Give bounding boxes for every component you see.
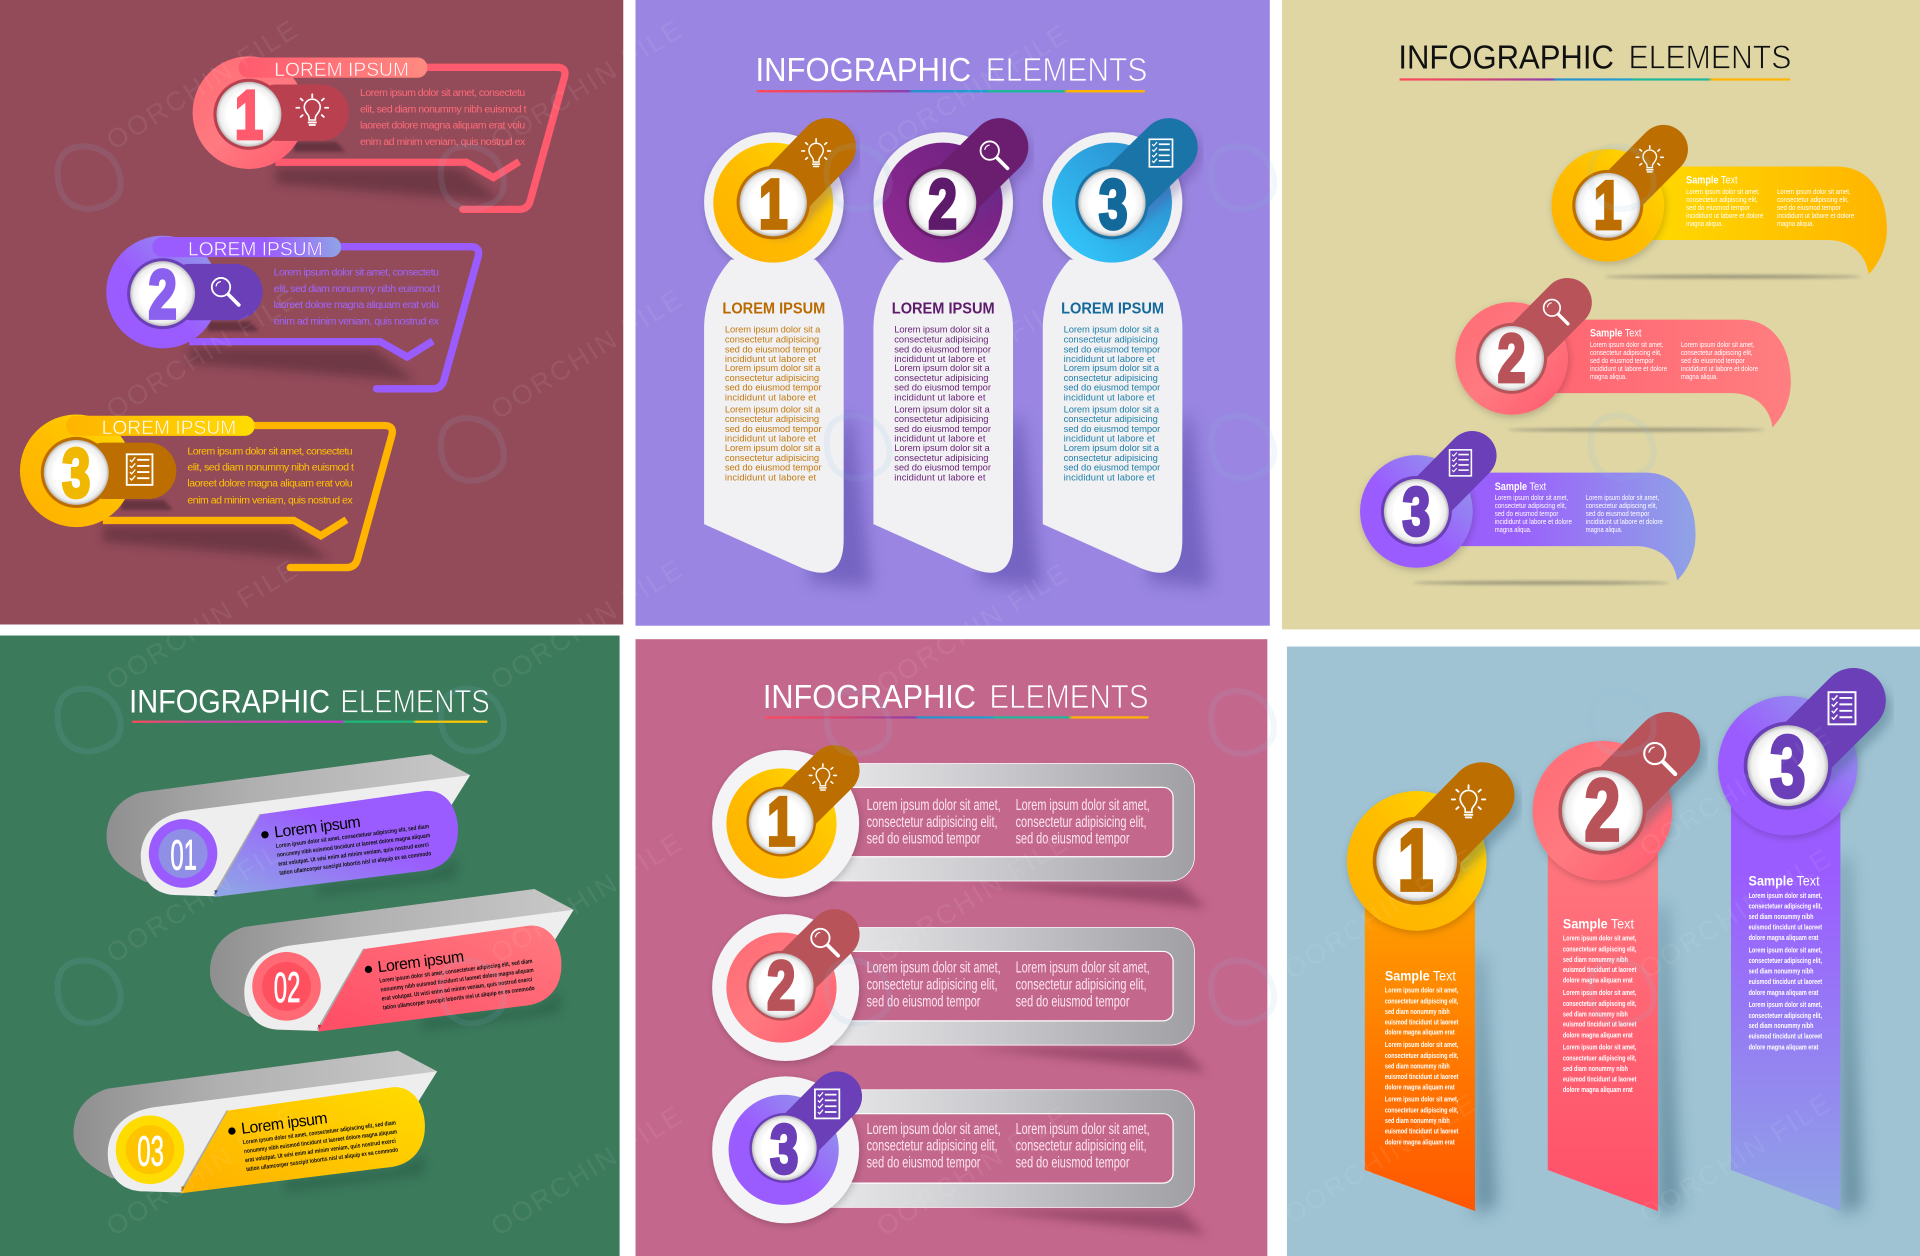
text: OORCHIN FILE xyxy=(101,283,304,425)
banner 3: consectetuer adipiscing elit, xyxy=(1749,1011,1822,1020)
callout 2: violet xyxy=(106,236,479,389)
column 1: consectetur adipisicing xyxy=(725,413,819,424)
column 1: 1 xyxy=(759,165,788,244)
banner 3: sed diam nonummy nibh xyxy=(1749,912,1814,921)
ribbon 2: magna aliqua. xyxy=(1681,372,1718,381)
banner 3: sed diam nonummy nibh xyxy=(1749,1021,1814,1030)
callout 2: violet: enim ad minim veniam, quis nostrud ex xyxy=(274,315,440,327)
ribbon 1: incididunt ut labore et dolore xyxy=(1777,211,1854,220)
banner 2: Lorem ipsum dolor sit amet, xyxy=(1563,934,1636,943)
callout 3: amber: laoreet dolore magna aliquam erat volu xyxy=(187,478,353,490)
ribbon 3: Sample Text xyxy=(1495,481,1546,493)
bar 2: Lorem ipsum xyxy=(377,948,465,976)
title xyxy=(129,684,490,723)
banner 1: Lorem ipsum dolor sit amet, xyxy=(1385,1095,1458,1104)
banner 2 xyxy=(1533,741,1680,1215)
row 3: consectetur adipisicing elit, xyxy=(867,1138,998,1155)
banner 3 xyxy=(1718,692,1862,1215)
column 1: sed do eiusmod tempor xyxy=(725,343,822,354)
row 2: sed do eiusmod tempor xyxy=(1016,994,1129,1011)
ribbon 1: Lorem ipsum dolor sit amet, xyxy=(1777,187,1851,196)
title: INFOGRAPHIC xyxy=(129,684,330,720)
column 3: incididunt ut labore et xyxy=(1064,353,1155,364)
bar 1: tation ullamcorper suscipit lobortis nisl ut aliquip ex ea commodo xyxy=(279,850,432,877)
column 3: 3 xyxy=(1099,165,1128,244)
column 1: sed do eiusmod tempor xyxy=(725,462,822,473)
text: OORCHIN FILE xyxy=(1634,842,1837,985)
text: OORCHIN FILE xyxy=(871,826,1075,969)
ribbon 2: Sample Text xyxy=(1590,328,1641,340)
banner 2: consectetuer adipiscing elit, xyxy=(1563,999,1636,1008)
column 3: sed do eiusmod tempor xyxy=(1064,382,1160,393)
banner 2: sed diam nonummy nibh xyxy=(1563,1064,1628,1073)
bar 3: Lorem ipsum dolor sit amet, consectetuer adipiscing elit, sed diam xyxy=(242,1119,397,1146)
row 3: 3 xyxy=(770,1110,798,1187)
banner 2: sed diam nonummy nibh xyxy=(1563,955,1628,964)
ribbon 1: Lorem ipsum dolor sit amet, xyxy=(1686,187,1760,196)
ribbon 3: Lorem ipsum dolor sit amet, xyxy=(1495,493,1568,502)
callout 3: amber: 3 xyxy=(62,434,90,511)
row 3 xyxy=(712,1076,1206,1235)
column 2: sed do eiusmod tempor xyxy=(894,423,991,434)
column 2: incididunt ut labore et xyxy=(894,353,986,364)
ribbon 3: 3 xyxy=(1403,473,1430,549)
banner 3: euismod tincidunt ut laoreet xyxy=(1749,977,1822,986)
text: OORCHIN FILE xyxy=(101,553,304,696)
column 2: Lorem ipsum dolor sit a xyxy=(894,324,991,335)
panel: green 3D bars xyxy=(0,636,620,1256)
ribbon 2: magna aliqua. xyxy=(1590,372,1627,381)
callout 2: violet: elit, sed diam nonummy nibh euismod t xyxy=(274,283,440,295)
column 2: consectetur adipisicing xyxy=(894,413,989,424)
column 3: LOREM IPSUM xyxy=(1061,300,1164,317)
ribbon 2: consectetur adipiscing elit, xyxy=(1590,348,1662,357)
column 1: sed do eiusmod tempor xyxy=(725,382,822,393)
text: OORCHIN FILE xyxy=(101,13,304,156)
column 1: Lorem ipsum dolor sit a xyxy=(725,403,821,414)
ribbon 1: consectetur adipiscing elit, xyxy=(1777,195,1849,204)
column 2: incididunt ut labore et xyxy=(894,471,986,482)
text: OORCHIN FILE xyxy=(101,826,304,969)
column 2: incididunt ut labore et xyxy=(894,391,986,402)
banner 2: sed diam nonummy nibh xyxy=(1563,1009,1628,1018)
text: OORCHIN FILE xyxy=(486,826,689,969)
column 1: Lorem ipsum dolor sit a xyxy=(725,324,821,335)
bar 2: tation ullamcorper suscipit lobortis nisl ut aliquip ex ea commodo xyxy=(382,985,535,1012)
banner 1: consectetuer adipiscing elit, xyxy=(1385,1106,1458,1115)
ribbon 2: Lorem ipsum dolor sit amet, xyxy=(1681,340,1754,349)
text: OORCHIN FILE xyxy=(101,1099,304,1242)
callout 3: amber xyxy=(20,414,392,568)
banner 1: dolore magna aliquam erat xyxy=(1385,1083,1455,1092)
ribbon 1: incididunt ut labore et dolore xyxy=(1686,211,1763,220)
ribbon 1: consectetur adipiscing elit, xyxy=(1686,195,1758,204)
row 1: 1 xyxy=(767,782,795,860)
ribbon 3: sed do eiusmod tempor xyxy=(1495,509,1559,518)
column 2: sed do eiusmod tempor xyxy=(894,382,991,393)
panel: pink framed rows xyxy=(636,639,1267,1256)
bar 3: tation ullamcorper suscipit lobortis nisl ut aliquip ex ea commodo xyxy=(246,1147,399,1173)
banner 1: consectetuer adipiscing elit, xyxy=(1385,996,1458,1005)
column 1 xyxy=(704,132,872,588)
callout 3: amber: Lorem ipsum dolor sit amet, consectetu xyxy=(187,445,353,457)
title xyxy=(1398,40,1791,81)
callout 2: violet: 2 xyxy=(149,255,177,333)
ribbon 1 xyxy=(1551,146,1887,278)
banner 2: Sample Text xyxy=(1563,915,1634,931)
ribbon 3 xyxy=(1360,450,1696,584)
title: ELEMENTS xyxy=(340,684,490,720)
column 2: consectetur adipisicing xyxy=(894,452,989,463)
row 3: sed do eiusmod tempor xyxy=(867,1155,980,1172)
panel: blue vertical banners xyxy=(1287,647,1920,1256)
bar 1 xyxy=(107,754,470,898)
callout 2: violet: laoreet dolore magna aliquam erat volu xyxy=(274,299,439,311)
bar 3: Lorem ipsum xyxy=(240,1110,329,1138)
banner 3: Lorem ipsum dolor sit amet, xyxy=(1749,945,1822,954)
column 3 xyxy=(1043,132,1211,588)
banner 2: euismod tincidunt ut laoreet xyxy=(1563,1074,1637,1083)
text: OORCHIN FILE xyxy=(486,283,689,425)
row 3: consectetur adipisicing elit, xyxy=(1016,1138,1147,1155)
banner 3: euismod tincidunt ut laoreet xyxy=(1749,923,1822,932)
title: INFOGRAPHIC xyxy=(763,679,976,716)
banner 3: Lorem ipsum dolor sit amet, xyxy=(1749,891,1822,900)
banner 1: dolore magna aliquam erat xyxy=(1385,1137,1455,1146)
callout 1: coral xyxy=(193,56,565,209)
banner 2: 2 xyxy=(1584,763,1620,859)
title: ELEMENTS xyxy=(986,52,1147,89)
banner 3: dolore magna aliquam erat xyxy=(1749,933,1819,942)
column 3: Lorem ipsum dolor sit a xyxy=(1064,324,1160,335)
title xyxy=(763,679,1149,719)
column 3: consectetur adipisicing xyxy=(1064,372,1158,383)
banner 3: 3 xyxy=(1770,719,1806,816)
ribbon 1: 1 xyxy=(1594,167,1622,243)
ribbon 1: Sample Text xyxy=(1686,175,1738,187)
banner 3: dolore magna aliquam erat xyxy=(1749,1043,1819,1052)
banner 2: consectetuer adipiscing elit, xyxy=(1563,1054,1636,1063)
column 2: Lorem ipsum dolor sit a xyxy=(894,442,991,453)
column 3: sed do eiusmod tempor xyxy=(1064,423,1160,434)
banner 3: euismod tincidunt ut laoreet xyxy=(1749,1032,1822,1041)
callout 1: coral: laoreet dolore magna aliquam erat volu xyxy=(360,120,525,132)
banner 2: dolore magna aliquam erat xyxy=(1563,976,1633,985)
row 1: consectetur adipisicing elit, xyxy=(867,814,998,831)
column 1: consectetur adipisicing xyxy=(725,452,819,463)
row 1: sed do eiusmod tempor xyxy=(867,831,980,848)
row 1: Lorem ipsum dolor sit amet, xyxy=(867,797,1001,814)
bar 3: 03 xyxy=(137,1129,164,1176)
ribbon 3: incididunt ut labore et dolore xyxy=(1586,517,1663,526)
callout 3: amber: enim ad minim veniam, quis nostrud ex xyxy=(187,494,353,506)
row 3: Lorem ipsum dolor sit amet, xyxy=(1016,1121,1150,1138)
column 1: sed do eiusmod tempor xyxy=(725,423,822,434)
callout 1: coral: LOREM IPSUM xyxy=(274,59,409,81)
ribbon 2: incididunt ut labore et dolore xyxy=(1681,364,1758,373)
row 2 xyxy=(712,914,1206,1073)
ribbon 2: consectetur adipiscing elit, xyxy=(1681,348,1753,357)
title: INFOGRAPHIC xyxy=(756,52,971,89)
ribbon 3: consectetur adipiscing elit, xyxy=(1586,501,1657,510)
row 1 xyxy=(712,750,1206,909)
column 3: consectetur adipisicing xyxy=(1064,452,1158,463)
banner 1: sed diam nonummy nibh xyxy=(1385,1007,1450,1016)
callout 1: coral: elit, sed diam nonummy nibh euismod t xyxy=(360,103,527,115)
text: OORCHIN FILE xyxy=(486,1099,689,1242)
callout 1: coral: Lorem ipsum dolor sit amet, consectetu xyxy=(360,87,525,99)
row 2: consectetur adipisicing elit, xyxy=(1016,977,1147,994)
callout 3: amber: elit, sed diam nonummy nibh euismod t xyxy=(187,462,354,474)
callout 1: coral: enim ad minim veniam, quis nostrud ex xyxy=(360,136,526,148)
banner 3: consectetuer adipiscing elit, xyxy=(1749,956,1822,965)
banner 2: dolore magna aliquam erat xyxy=(1563,1031,1633,1040)
row 3: sed do eiusmod tempor xyxy=(1016,1155,1129,1172)
callout 1: coral: 1 xyxy=(235,76,263,153)
column 3: Lorem ipsum dolor sit a xyxy=(1064,362,1160,373)
title: ELEMENTS xyxy=(1629,40,1791,77)
column 3: Lorem ipsum dolor sit a xyxy=(1064,442,1160,453)
row 1: consectetur adipisicing elit, xyxy=(1016,814,1147,831)
banner 2: dolore magna aliquam erat xyxy=(1563,1085,1633,1094)
title xyxy=(756,52,1147,92)
column 2: LOREM IPSUM xyxy=(892,300,995,317)
column 2: Lorem ipsum dolor sit a xyxy=(894,362,991,373)
panel: sand ribbons xyxy=(1282,0,1920,629)
bar 3 xyxy=(73,1051,437,1194)
banner 1: Sample Text xyxy=(1385,967,1456,983)
banner 2: consectetuer adipiscing elit, xyxy=(1563,944,1636,953)
title: INFOGRAPHIC xyxy=(1398,40,1614,77)
banner 1: sed diam nonummy nibh xyxy=(1385,1061,1450,1070)
bar 3: nonummy nibh euismod tincidunt ut laoreet dolore magna aliquam xyxy=(244,1128,398,1155)
text: OORCHIN FILE xyxy=(871,557,1075,699)
callout 2: violet: Lorem ipsum dolor sit amet, consectetu xyxy=(274,267,439,279)
text: OORCHIN FILE xyxy=(486,553,689,696)
row 2: Lorem ipsum dolor sit amet, xyxy=(867,960,1001,977)
row 2: 2 xyxy=(767,946,795,1024)
ribbon 2: sed do eiusmod tempor xyxy=(1681,356,1745,365)
row 3: Lorem ipsum dolor sit amet, xyxy=(867,1121,1001,1138)
ribbon 1: sed do eiusmod tempor xyxy=(1686,203,1750,212)
text: OORCHIN FILE xyxy=(486,13,689,156)
column 2: 2 xyxy=(928,165,957,244)
ribbon 2: Lorem ipsum dolor sit amet, xyxy=(1590,340,1663,349)
ribbon 2 xyxy=(1455,300,1791,431)
column 3: incididunt ut labore et xyxy=(1064,391,1155,402)
column 1: incididunt ut labore et xyxy=(725,471,816,482)
title: ELEMENTS xyxy=(989,679,1149,716)
column 1: Lorem ipsum dolor sit a xyxy=(725,442,821,453)
ribbon 3: consectetur adipiscing elit, xyxy=(1495,501,1566,510)
row 1: sed do eiusmod tempor xyxy=(1016,831,1129,848)
column 3: sed do eiusmod tempor xyxy=(1064,343,1160,354)
column 2: consectetur adipisicing xyxy=(894,372,989,383)
ribbon 2: incididunt ut labore et dolore xyxy=(1590,364,1667,373)
column 2: sed do eiusmod tempor xyxy=(894,343,991,354)
bar 2: erat volutpat. Ut wisi enim ad minim veniam, quis nostrud exerci xyxy=(381,976,533,1003)
column 2: consectetur adipisicing xyxy=(894,333,989,344)
callout 3: amber: LOREM IPSUM xyxy=(102,417,236,439)
banner 1: 1 xyxy=(1398,813,1433,910)
text: OORCHIN FILE xyxy=(1279,1087,1482,1230)
column 2: incididunt ut labore et xyxy=(894,433,986,444)
text: OORCHIN FILE xyxy=(871,1099,1075,1242)
banner 2: Lorem ipsum dolor sit amet, xyxy=(1563,988,1636,997)
bar 1: Lorem ipsum dolor sit amet, consectetuer adipiscing elit, sed diam xyxy=(275,823,430,850)
banner 3: Lorem ipsum dolor sit amet, xyxy=(1749,1000,1822,1009)
column 2: Lorem ipsum dolor sit a xyxy=(894,403,991,414)
bar 3: erat volutpat. Ut wisi enim ad minim veniam, quis nostrud exerci xyxy=(245,1138,396,1164)
column 1: Lorem ipsum dolor sit a xyxy=(725,362,821,373)
banner 1: euismod tincidunt ut laoreet xyxy=(1385,1072,1459,1081)
row 2: consectetur adipisicing elit, xyxy=(867,977,998,994)
ribbon 1: magna aliqua. xyxy=(1686,219,1723,228)
panel: purple columns xyxy=(636,0,1270,626)
banner 1: consectetuer adipiscing elit, xyxy=(1385,1051,1458,1060)
banner 1: euismod tincidunt ut laoreet xyxy=(1385,1126,1459,1135)
column 3: consectetur adipisicing xyxy=(1064,413,1158,424)
column 1: consectetur adipisicing xyxy=(725,372,819,383)
banner 1 xyxy=(1347,785,1496,1215)
ribbon 3: Lorem ipsum dolor sit amet, xyxy=(1586,493,1659,502)
banner 3: Sample Text xyxy=(1749,873,1820,889)
banner 1: Lorem ipsum dolor sit amet, xyxy=(1385,1040,1458,1049)
ribbon 1: sed do eiusmod tempor xyxy=(1777,203,1841,212)
column 1: LOREM IPSUM xyxy=(722,300,825,317)
ribbon 2: 2 xyxy=(1498,320,1525,396)
banner 3: dolore magna aliquam erat xyxy=(1749,988,1819,997)
bar 2: Lorem ipsum dolor sit amet, consectetuer adipiscing elit, sed diam xyxy=(379,958,533,985)
ribbon 3: sed do eiusmod tempor xyxy=(1586,509,1650,518)
ribbon 3: magna aliqua. xyxy=(1586,525,1622,534)
callout 2: violet: LOREM IPSUM xyxy=(188,238,323,260)
ribbon 3: incididunt ut labore et dolore xyxy=(1495,517,1572,526)
column 1: incididunt ut labore et xyxy=(725,391,816,402)
column 3: Lorem ipsum dolor sit a xyxy=(1064,403,1160,414)
banner 1: Lorem ipsum dolor sit amet, xyxy=(1385,986,1458,995)
ribbon 2: sed do eiusmod tempor xyxy=(1590,356,1654,365)
bar 1: nonummy nibh euismod tincidunt ut laoreet dolore magna aliquam xyxy=(277,832,431,859)
banner 2: Lorem ipsum dolor sit amet, xyxy=(1563,1043,1636,1052)
column 2: sed do eiusmod tempor xyxy=(894,462,991,473)
text: OORCHIN FILE xyxy=(1279,842,1482,985)
column 2 xyxy=(873,132,1041,588)
ribbon 1: magna aliqua. xyxy=(1777,219,1814,228)
column 1: incididunt ut labore et xyxy=(725,433,816,444)
text: OORCHIN FILE xyxy=(871,288,1075,430)
bar 2: 02 xyxy=(274,965,300,1012)
text: OORCHIN FILE xyxy=(1634,720,1837,862)
text: OORCHIN FILE xyxy=(871,18,1075,161)
panel: maroon outlined callouts xyxy=(0,0,623,624)
column 3: consectetur adipisicing xyxy=(1064,333,1158,344)
bar 2: nonummy nibh euismod tincidunt ut laoreet dolore magna aliquam xyxy=(380,967,534,994)
row 2: sed do eiusmod tempor xyxy=(867,994,980,1011)
column 3: incididunt ut labore et xyxy=(1064,471,1155,482)
ribbon 3: magna aliqua. xyxy=(1495,525,1531,534)
bar 1: Lorem ipsum xyxy=(273,814,362,842)
banner 1: dolore magna aliquam erat xyxy=(1385,1028,1455,1037)
text: OORCHIN FILE xyxy=(1634,1087,1837,1230)
bar 1: 01 xyxy=(170,832,197,879)
banner 2: euismod tincidunt ut laoreet xyxy=(1563,1020,1637,1029)
row 1: Lorem ipsum dolor sit amet, xyxy=(1016,797,1150,814)
banner 1: euismod tincidunt ut laoreet xyxy=(1385,1017,1459,1026)
banner 3: consectetuer adipiscing elit, xyxy=(1749,902,1822,911)
bar 1: erat volutpat. Ut wisi enim ad minim veniam, quis nostrud exerci xyxy=(278,841,430,868)
banner 1: sed diam nonummy nibh xyxy=(1385,1116,1450,1125)
column 1: consectetur adipisicing xyxy=(725,333,819,344)
column 1: incididunt ut labore et xyxy=(725,353,816,364)
bar 2 xyxy=(210,889,574,1032)
banner 3: sed diam nonummy nibh xyxy=(1749,967,1814,976)
column 3: sed do eiusmod tempor xyxy=(1064,462,1160,473)
column 3: incididunt ut labore et xyxy=(1064,433,1155,444)
banner 2: euismod tincidunt ut laoreet xyxy=(1563,965,1637,974)
row 2: Lorem ipsum dolor sit amet, xyxy=(1016,960,1150,977)
